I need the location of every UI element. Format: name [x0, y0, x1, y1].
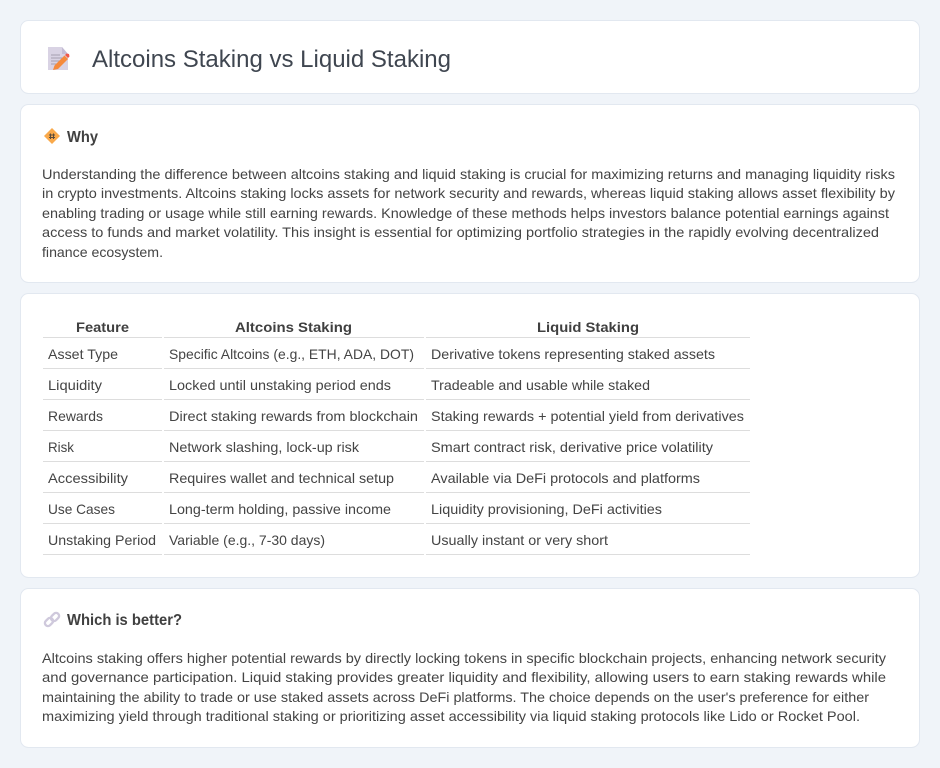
- table row: liquidity: Tradeable and usable while staked: [431, 377, 650, 393]
- table row: liquidity: [43, 377, 750, 400]
- text block: which is better paragraph: maintaining the ability to trade or use staked assets across DeFi platforms. The choice depends on the user's preference for either: [42, 689, 869, 705]
- text block: which is better paragraph: maximizing yield through traditional staking or prioritizing asset accessibility via liquid staking protocols like Lido or Rocket Pool.: [42, 708, 860, 724]
- table row: use cases: Long-term holding, passive income: [169, 501, 391, 517]
- table row: risk: Risk: [48, 439, 75, 455]
- table row: asset type: Specific Altcoins (e.g., ETH, ADA, DOT): [169, 346, 414, 362]
- table row: liquidity: Liquidity: [48, 377, 102, 393]
- table row: asset type: Derivative tokens representing staked assets: [431, 346, 715, 362]
- table row: accessibility: Requires wallet and technical setup: [169, 470, 394, 486]
- table header row: Altcoins Staking: [235, 319, 352, 335]
- table row: rewards: Staking rewards + potential yield from derivatives: [431, 408, 744, 424]
- panel: title header: [20, 20, 920, 94]
- text block: which is better paragraph: [42, 650, 886, 724]
- table row: rewards: Direct staking rewards from blockchain: [169, 408, 418, 424]
- title: Altcoins Staking vs Liquid Staking: [92, 46, 451, 73]
- panel: comparison table: [20, 294, 920, 578]
- table row: rewards: [43, 408, 750, 430]
- text block: why paragraph: enabling trading or usage while still earning rewards. Knowledge of these methods helps investors balance potential earnings against: [42, 205, 889, 221]
- heading: why: Why: [67, 129, 98, 146]
- table row: use cases: [43, 501, 750, 524]
- text block: why paragraph: in crypto investments. Altcoins staking locks assets for network security and rewards, whereas liquid staking allows asset flexibility by: [42, 185, 895, 201]
- table row: accessibility: Available via DeFi protocols and platforms: [431, 470, 700, 486]
- icon: link: [44, 612, 60, 627]
- table row: asset type: [43, 346, 750, 368]
- table row: unstaking period: Variable (e.g., 7-30 days): [169, 532, 325, 548]
- table row: accessibility: Accessibility: [48, 470, 128, 486]
- icon: document with pencil: [48, 47, 70, 70]
- heading: which is better: Which is better?: [67, 612, 182, 629]
- table header row: Feature: [76, 319, 129, 335]
- panel: which is better: [20, 588, 920, 748]
- table row: asset type: Asset Type: [48, 346, 118, 362]
- table row: risk: Smart contract risk, derivative price volatility: [431, 439, 713, 455]
- table header row: [43, 319, 750, 338]
- text block: why paragraph: Understanding the difference between altcoins staking and liquid staking is crucial for maximizing returns and managing liquidity risks: [42, 166, 895, 182]
- table row: use cases: Use Cases: [48, 501, 115, 517]
- text block: why paragraph: finance ecosystem.: [42, 244, 163, 260]
- table row: accessibility: [43, 470, 750, 492]
- table row: risk: [43, 439, 750, 462]
- text block: which is better paragraph: Altcoins staking offers higher potential rewards by directly locking tokens in specific blockchain projects, enhancing network security: [42, 650, 886, 666]
- icon: warning diamond: [44, 128, 60, 144]
- table row: rewards: Rewards: [48, 408, 103, 424]
- text block: which is better paragraph: and governance participation. Liquid staking provides greater liquidity and flexibility, allowing users to earn staking rewards while: [42, 669, 886, 685]
- table row: unstaking period: Usually instant or very short: [431, 532, 608, 548]
- table header row: Liquid Staking: [537, 319, 639, 335]
- table row: unstaking period: Unstaking Period: [48, 532, 156, 548]
- table row: unstaking period: [43, 532, 750, 554]
- table row: liquidity: Locked until unstaking period ends: [169, 377, 391, 393]
- table row: use cases: Liquidity provisioning, DeFi activities: [431, 501, 662, 517]
- panel: why: [20, 104, 920, 282]
- table row: risk: Network slashing, lock-up risk: [169, 439, 360, 455]
- text block: why paragraph: access to funds and market volatility. This insight is essential for optimizing portfolio strategies in the rapidly evolving decentralized: [42, 224, 879, 240]
- text block: why paragraph: [42, 166, 895, 260]
